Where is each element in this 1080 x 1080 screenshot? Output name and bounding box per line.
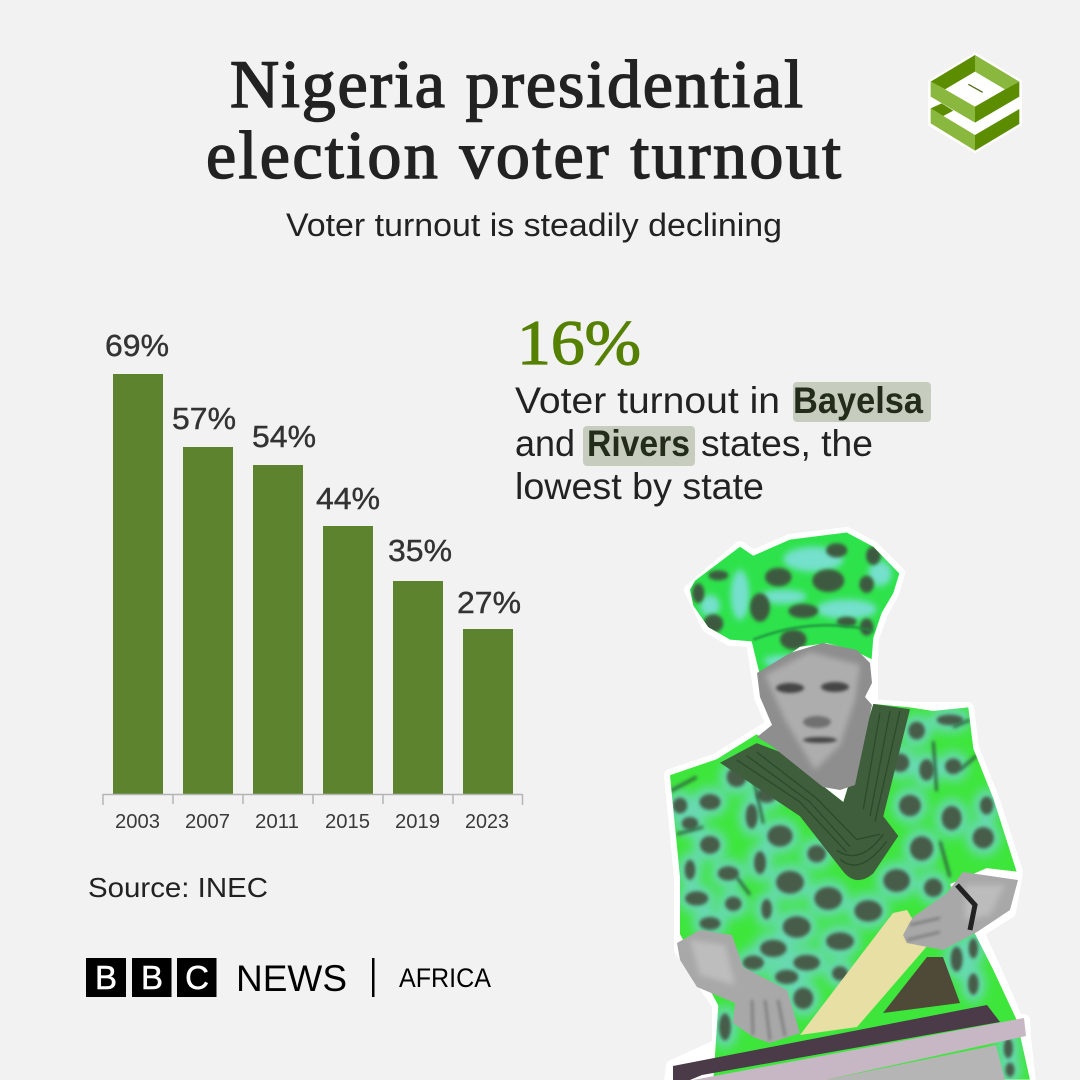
- logo: BBC News Africa: [86, 958, 491, 999]
- neckline embroidery: [720, 704, 910, 880]
- logo: BBC News Africa: C: [185, 959, 209, 996]
- icon: ballot box logo: [928, 53, 1022, 153]
- logo: BBC News Africa: B: [141, 959, 163, 996]
- ballot box: [673, 1005, 1026, 1080]
- bar chart: turnout by election year: 35%: [388, 533, 452, 568]
- title: Nigeria presidential: [230, 46, 803, 122]
- ballot paper: [800, 910, 928, 1035]
- headwrap: [690, 532, 900, 672]
- bar chart: turnout by election year: 57%: [172, 401, 236, 436]
- callout: 16% lowest turnout: Rivers: [587, 423, 690, 464]
- source: Source: INEC: [88, 872, 268, 903]
- logo: BBC News Africa: B: [95, 959, 117, 996]
- title: election voter turnout: [206, 117, 841, 193]
- bar chart: turnout by election year: 2011: [255, 811, 299, 833]
- callout: 16% lowest turnout: states, the: [701, 423, 873, 464]
- callout: 16% lowest turnout: and: [515, 423, 575, 464]
- callout: 16% lowest turnout: [515, 307, 931, 507]
- bar chart: turnout by election year: 2003: [115, 811, 160, 833]
- callout: 16% lowest turnout: lowest by state: [515, 466, 764, 507]
- bar chart: turnout by election year: 2023: [465, 811, 509, 833]
- callout: 16% lowest turnout: 16%: [517, 307, 641, 378]
- title: [206, 46, 841, 193]
- bar chart: turnout by election year: 2019: [395, 811, 440, 833]
- bar chart: turnout by election year: [103, 328, 522, 833]
- bar chart: turnout by election year: 54%: [252, 419, 316, 454]
- sleeve pleats: [670, 720, 977, 895]
- bar chart: turnout by election year: 2007: [185, 811, 230, 833]
- illustration: woman casting a ballot: [660, 527, 1033, 1080]
- subtitle: Voter turnout is steadily declining: [286, 207, 782, 243]
- dress: [660, 698, 1033, 1080]
- bar chart: turnout by election year: 69%: [105, 328, 169, 363]
- logo: BBC News Africa: NEWS: [236, 958, 347, 999]
- left arm and hand: [677, 930, 800, 1043]
- shadow under ballot: [883, 957, 960, 1013]
- bar chart: turnout by election year: 2015: [325, 811, 370, 833]
- white cut-out halo: [670, 533, 1030, 1080]
- bar chart: turnout by election year: 27%: [457, 585, 521, 620]
- logo: BBC News Africa: AFRICA: [399, 963, 491, 993]
- callout: 16% lowest turnout: Bayelsa: [793, 380, 923, 421]
- bar chart: turnout by election year: 44%: [316, 481, 380, 516]
- callout: 16% lowest turnout: Voter turnout in: [515, 380, 780, 421]
- right arm and hand: [903, 872, 1018, 950]
- face and neck: [757, 643, 872, 790]
